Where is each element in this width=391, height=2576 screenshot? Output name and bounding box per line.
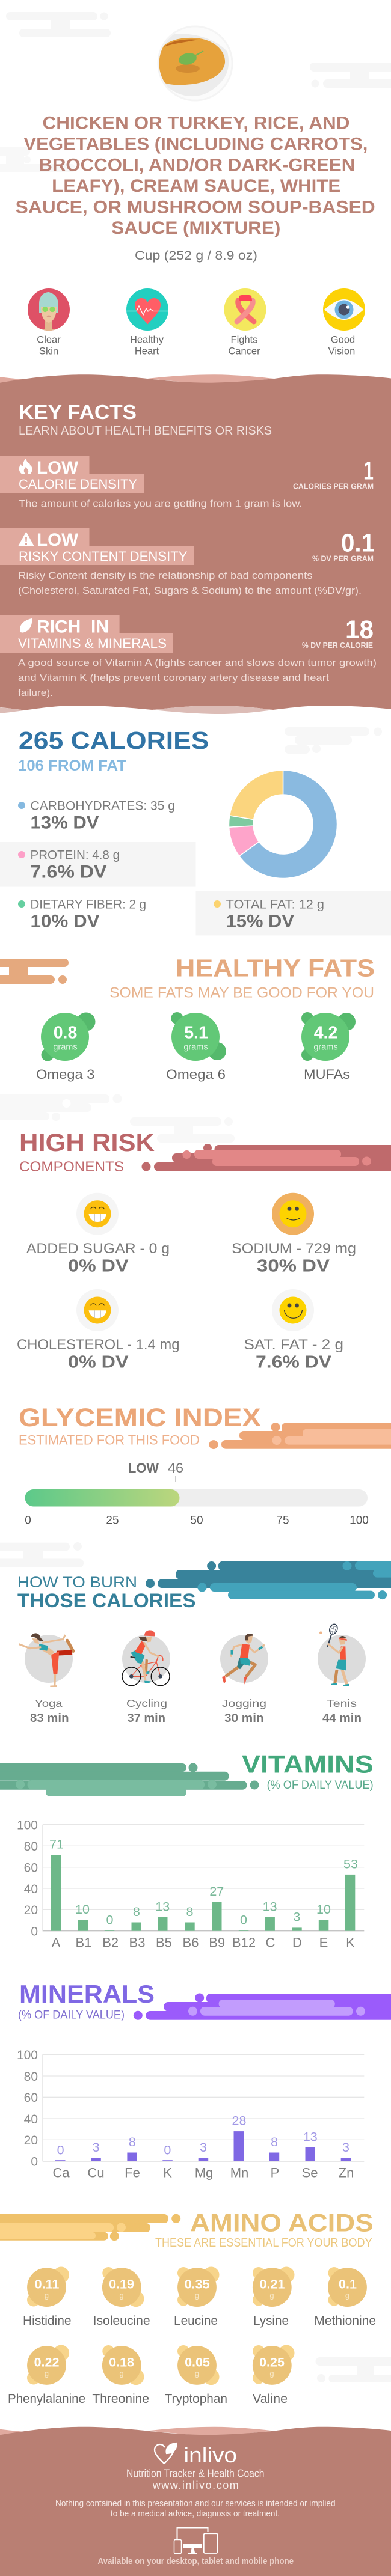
bar chart: minerals: 3 (200, 2140, 207, 2155)
bar chart: vitamins: 71 (49, 1837, 64, 1852)
bar chart: minerals: P (271, 2165, 279, 2181)
bar chart: minerals: 0 (164, 2143, 171, 2157)
heading: HEALTHY FATS (176, 954, 375, 981)
fact: rich in vitamins and minerals: and Vitamin K (helps prevent coronary artery disease and heart (18, 673, 329, 683)
bar chart: vitamins: B1 (76, 1935, 91, 1950)
bubble: omega 3: Omega 3 (36, 1067, 95, 1082)
amino: tryptophan: g (195, 2369, 199, 2378)
bar chart: vitamins: E (319, 1935, 328, 1950)
heading: GLYCEMIC INDEX (19, 1403, 261, 1432)
heading: HIGH RISK (19, 1128, 155, 1156)
title: SAUCE (MIXTURE) (111, 218, 280, 238)
panel: key facts (0, 374, 391, 714)
risk item: saturated fat: 7.6% DV (256, 1353, 331, 1372)
macro: dietary fiber (18, 897, 146, 932)
macro: carbohydrates (18, 799, 175, 833)
macro: carbohydrates: 13% DV (30, 813, 99, 833)
subheading: (% OF DAILY VALUE) (267, 1778, 374, 1792)
risk item: saturated fat: SAT. FAT - 2 g (244, 1337, 343, 1353)
bar chart: vitamins: 8 (186, 1905, 194, 1919)
risk item: sodium: 30% DV (257, 1257, 330, 1276)
bar chart: minerals: 0 (57, 2143, 64, 2157)
bar chart: vitamins: 27 (209, 1884, 224, 1899)
amino: valine: Valine (253, 2392, 288, 2406)
fact: rich in vitamins and minerals: 18 (345, 615, 374, 644)
decorative bars: high risk (142, 1144, 391, 1171)
bar chart: vitamins: B12 (232, 1935, 256, 1950)
panel: high risk components (0, 1094, 391, 1372)
amino: threonine: Threonine (92, 2392, 149, 2406)
amino: methionine: g (345, 2291, 349, 2300)
macro: protein: PROTEIN: 4.8 g (30, 849, 120, 862)
soup bowl image (156, 24, 235, 102)
fact: rich in vitamins and minerals: % DV PER CALORIE (302, 641, 373, 650)
subheading: COMPONENTS (19, 1159, 124, 1175)
activity: yoga: Yoga (35, 1697, 63, 1709)
bubble: MUFAs: 4.2 (314, 1024, 337, 1043)
subheading: (% OF DAILY VALUE) (18, 2009, 125, 2022)
gauge scale: 50 (190, 1515, 203, 1527)
panel: calories (0, 727, 391, 935)
panel: health benefits (28, 288, 365, 357)
bubble: omega 3 (36, 1012, 95, 1082)
bar chart: vitamins: 40 (24, 1882, 38, 1896)
activity: tennis: Tenis (327, 1697, 357, 1709)
title: VEGETABLES (INCLUDING CARROTS, (23, 135, 368, 154)
bar chart: vitamins: 100 (17, 1819, 38, 1832)
website: www.inlivo.com (152, 2479, 239, 2491)
tagline: Nutrition Tracker & Health Coach (126, 2467, 265, 2479)
amino: lysine: 0.21 (260, 2277, 285, 2292)
icon: good vision eye (323, 288, 365, 331)
bar chart: minerals: Cu (88, 2165, 105, 2181)
icon: devices (174, 2528, 218, 2554)
gauge label: low 46: LOW (128, 1460, 159, 1476)
amino: leucine: Leucine (174, 2314, 218, 2328)
decorative bars: healthy fats (0, 959, 69, 984)
decorative bars: burn (146, 1561, 391, 1599)
gauge scale: 0 (25, 1515, 31, 1527)
decorative bars: vitamins (0, 1763, 259, 1796)
decorative cloud: amino (315, 2357, 391, 2382)
decorative cloud: top right (310, 63, 391, 88)
fact: risky content density: (Cholesterol, Saturated Fat, Sugars & Sodium) to the amount (%DV/gr). (18, 585, 362, 596)
amino: tryptophan: 0.05 (185, 2355, 210, 2370)
disclaimer: to be a medical advice, diagnosis or treatment. (111, 2509, 280, 2519)
heading: KEY FACTS (19, 401, 137, 423)
risk item: saturated fat (244, 1289, 343, 1372)
bubble: MUFAs: MUFAs (304, 1067, 350, 1082)
bar chart: minerals (17, 2048, 364, 2181)
benefit labels: Good (331, 334, 355, 345)
bubble: omega 6: grams (183, 1043, 208, 1052)
decorative bars: minerals (134, 1993, 391, 2020)
donut chart (229, 771, 337, 879)
fact: calorie density: CALORIE DENSITY (19, 477, 137, 492)
amino: isoleucine: Isoleucine (93, 2314, 150, 2328)
panel: minerals (17, 1980, 391, 2181)
panel: glycemic index (19, 1403, 391, 1527)
gauge scale: 25 (106, 1515, 119, 1527)
amino: lysine: g (269, 2291, 274, 2300)
bar chart: vitamins: B3 (129, 1935, 145, 1950)
bar chart: minerals: Mg (195, 2165, 213, 2181)
amino: histidine: g (45, 2291, 49, 2300)
decorative cloud: top left (6, 12, 111, 37)
amino: histidine (23, 2267, 72, 2328)
activity: cycling: 37 min (128, 1712, 165, 1725)
bar chart: vitamins: B9 (209, 1935, 225, 1950)
panel: amino acids (0, 2208, 391, 2406)
bar chart: minerals: 20 (24, 2134, 38, 2147)
risk item: added sugar: ADDED SUGAR - 0 g (26, 1241, 170, 1257)
risk item: sodium (232, 1193, 356, 1276)
bar chart: minerals: Se (302, 2165, 318, 2181)
activity: jogging: Jogging (222, 1697, 266, 1709)
amino: valine: g (269, 2369, 274, 2378)
bar chart: vitamins: B5 (156, 1935, 172, 1950)
benefit labels: Healthy (130, 334, 164, 345)
decorative cloud: high risk left (0, 1094, 122, 1121)
bar chart: minerals: 13 (303, 2129, 318, 2144)
heading: AMINO ACIDS (190, 2208, 374, 2236)
heading: 265 calories: 265 CALORIES (19, 727, 209, 754)
amino: isoleucine (93, 2267, 150, 2328)
bar chart: vitamins: 3 (293, 1910, 300, 1924)
disclaimer: Nothing contained in this presentation and our services is intended or implied (55, 2499, 336, 2509)
risk item: added sugar: 0% DV (68, 1257, 129, 1276)
risk item: cholesterol: CHOLESTEROL - 1.4 mg (17, 1337, 179, 1353)
amino: leucine (174, 2267, 219, 2328)
amino: valine: 0.25 (259, 2355, 285, 2370)
fact: rich in vitamins and minerals (0, 615, 377, 698)
amino: lysine (253, 2267, 295, 2328)
decorative bars: amino acids (0, 2214, 180, 2241)
bubble: omega 6: Omega 6 (166, 1067, 226, 1082)
bubble: MUFAs: grams (313, 1043, 338, 1052)
bar chart: minerals: 8 (129, 2135, 136, 2149)
fact: rich in vitamins and minerals: VITAMINS & MINERALS (18, 636, 167, 651)
activity: yoga (19, 1633, 73, 1725)
amino: methionine: 0.1 (339, 2277, 357, 2292)
bubble: omega 3: grams (53, 1043, 78, 1052)
risk item: cholesterol (17, 1289, 179, 1372)
fact: rich in vitamins and minerals: RICH IN (37, 617, 109, 637)
icon: healthy heart (126, 288, 168, 331)
amino: threonine: g (119, 2369, 124, 2378)
heading line two: THOSE CALORIES (17, 1590, 196, 1611)
amino: isoleucine: 0.19 (109, 2277, 134, 2292)
bar chart: minerals: 80 (24, 2070, 38, 2084)
bar chart: vitamins: C (265, 1935, 275, 1950)
decorative cloud: calories (285, 727, 382, 754)
bar chart: vitamins: 53 (343, 1857, 358, 1871)
subheading: ESTIMATED FOR THIS FOOD (19, 1433, 200, 1448)
macro: dietary fiber: 10% DV (30, 912, 100, 932)
amino: valine (253, 2345, 295, 2406)
activity: cycling (122, 1630, 170, 1725)
bar chart: vitamins (17, 1819, 364, 1950)
fact: calorie density: LOW (37, 458, 79, 478)
fact: calorie density: 1 (363, 457, 374, 486)
fact: risky content density: LOW (37, 530, 79, 550)
subheading: from fat: 106 FROM FAT (18, 757, 126, 774)
logo wordmark: inlivo (184, 2443, 237, 2467)
subheading: THESE ARE ESSENTIAL FOR YOUR BODY (155, 2236, 372, 2250)
benefit labels: Fights (231, 334, 257, 345)
amino: methionine (314, 2267, 376, 2328)
decorative cloud: behind title (0, 147, 75, 172)
amino: histidine: 0.11 (35, 2277, 59, 2292)
risk item: cholesterol: 0% DV (68, 1353, 129, 1372)
heading line one: HOW TO BURN (17, 1574, 137, 1591)
amino: phenylalanine (8, 2345, 85, 2406)
bar chart: vitamins: D (292, 1935, 302, 1950)
fact: risky content density (0, 528, 375, 596)
bar chart: minerals: Mn (230, 2165, 248, 2181)
bar chart: minerals: 3 (93, 2140, 100, 2155)
fact: calorie density (0, 456, 374, 510)
activity: jogging (220, 1634, 268, 1725)
bubble: omega 6 (166, 1012, 226, 1082)
amino: histidine: Histidine (23, 2314, 72, 2328)
macro: dietary fiber: DIETARY FIBER: 2 g (30, 897, 146, 911)
amino: leucine: g (195, 2291, 199, 2300)
activity: tennis: 44 min (322, 1712, 362, 1725)
decorative bars: glycemic index (209, 1423, 391, 1449)
title: CHICKEN OR TURKEY, RICE, AND (42, 113, 350, 133)
fact: rich in vitamins and minerals: failure). (18, 688, 53, 698)
bar chart: minerals: 3 (342, 2140, 349, 2155)
heading: MINERALS (19, 1980, 155, 2008)
title (16, 113, 375, 238)
bar chart: vitamins: A (52, 1935, 61, 1950)
bar chart: vitamins: 0 (240, 1913, 247, 1927)
macro: total fat (196, 891, 391, 935)
serving size: Cup (252 g / 8.9 oz) (135, 249, 257, 263)
amino: tryptophan: Tryptophan (165, 2392, 227, 2406)
benefit labels: Clear (37, 334, 61, 345)
bar chart: vitamins: 0 (31, 1924, 38, 1939)
bar chart: vitamins: 10 (75, 1902, 90, 1917)
gauge label: low 46 (128, 1460, 183, 1482)
benefit labels (37, 334, 355, 357)
decorative cloud: high risk right (130, 1117, 235, 1143)
fact: rich in vitamins and minerals: A good source of Vitamin A (fights cancer and slows down tumor growth) (18, 658, 377, 668)
activity: tennis (318, 1623, 366, 1725)
bar chart: minerals: 0 (31, 2155, 38, 2169)
heading: VITAMINS (242, 1750, 374, 1778)
amino: tryptophan (165, 2345, 227, 2406)
risk item: sodium: SODIUM - 729 mg (232, 1241, 356, 1257)
bar chart: vitamins: 0 (106, 1913, 114, 1927)
activity: cycling: Cycling (126, 1697, 167, 1709)
logo: heart and leaf (155, 2443, 177, 2464)
icon: warning triangle (18, 531, 34, 546)
bar chart: vitamins: 20 (24, 1903, 38, 1917)
bar chart: minerals: 100 (17, 2048, 38, 2062)
benefit labels: Cancer (228, 346, 260, 357)
bar chart: vitamins: 10 (316, 1902, 331, 1917)
amino: threonine: 0.18 (109, 2355, 134, 2370)
bar chart: vitamins: 13 (155, 1899, 170, 1914)
bar chart: minerals: Zn (339, 2165, 354, 2181)
fact: risky content density: 0.1 (341, 529, 375, 558)
macro: protein (0, 842, 196, 887)
footer wave background (0, 2427, 391, 2576)
title: LEAFY), CREAM SAUCE, WHITE (52, 176, 340, 196)
icon: clear skin (28, 288, 70, 331)
amino: phenylalanine: 0.22 (34, 2355, 59, 2370)
bubble: omega 6: 5.1 (184, 1024, 208, 1043)
benefit labels: Vision (328, 346, 355, 357)
decorative cloud: burn (0, 1542, 84, 1567)
risk item: added sugar (26, 1193, 170, 1276)
gauge label: low 46: 46 (168, 1460, 183, 1476)
activity: jogging: 30 min (224, 1712, 264, 1725)
bar chart: minerals: 8 (271, 2135, 278, 2149)
macro: protein: 7.6% DV (30, 862, 107, 882)
bar chart: minerals: K (163, 2165, 172, 2181)
bar chart: vitamins: 60 (24, 1861, 38, 1875)
title: BROCCOLI, AND/OR DARK-GREEN (38, 155, 355, 175)
activity: yoga: 83 min (30, 1712, 69, 1725)
panel: vitamins (0, 1750, 374, 1950)
amino: phenylalanine: Phenylalanine (8, 2392, 85, 2406)
amino: phenylalanine: g (45, 2369, 49, 2378)
bubble: MUFAs (301, 1012, 356, 1082)
panel: how to burn those calories (0, 1542, 391, 1725)
fact: risky content density: % DV PER GRAM (312, 554, 374, 563)
subheading: SOME FATS MAY BE GOOD FOR YOU (109, 985, 374, 1001)
fact: risky content density: RISKY CONTENT DENSITY (19, 549, 188, 564)
macro: total fat: TOTAL FAT: 12 g (226, 897, 324, 911)
panel: healthy fats (0, 954, 375, 1082)
title: SAUCE, OR MUSHROOM SOUP-BASED (16, 197, 375, 217)
fact: risky content density: Risky Content density is the relationship of bad components (18, 570, 313, 581)
bar chart: vitamins: 8 (133, 1905, 140, 1919)
amino: isoleucine: g (119, 2291, 124, 2300)
macro: total fat: 15% DV (226, 912, 294, 932)
benefit labels: Skin (39, 346, 58, 357)
bar chart: vitamins: K (346, 1935, 355, 1950)
benefit labels: Heart (135, 346, 159, 357)
bar chart: vitamins: B6 (183, 1935, 199, 1950)
icon: flame (19, 459, 32, 474)
wave band background (0, 374, 391, 714)
panel: footer (0, 2427, 391, 2576)
amino: leucine: 0.35 (185, 2277, 209, 2292)
disclaimer (55, 2499, 336, 2519)
bar chart: minerals: 28 (232, 2114, 246, 2128)
gauge scale: 75 (276, 1515, 289, 1527)
icon: leaf (20, 618, 32, 633)
amino: threonine (92, 2345, 149, 2406)
bar chart: vitamins: 13 (263, 1899, 277, 1914)
bar chart: minerals: Fe (125, 2165, 140, 2181)
gauge bar (25, 1489, 368, 1506)
icon: fights cancer ribbon (224, 288, 266, 331)
amino: lysine: Lysine (253, 2314, 289, 2328)
fact: calorie density: The amount of calories you are getting from 1 gram is low. (19, 499, 302, 510)
gauge scale: 100 (349, 1515, 369, 1527)
bar chart: minerals: 60 (24, 2091, 38, 2105)
bar chart: vitamins: B2 (102, 1935, 119, 1950)
bar chart: minerals: 40 (24, 2113, 38, 2126)
macro: carbohydrates: CARBOHYDRATES: 35 g (30, 799, 175, 813)
bar chart: vitamins: 80 (24, 1840, 38, 1854)
amino: methionine: Methionine (314, 2314, 376, 2328)
bubble: omega 3: 0.8 (54, 1024, 77, 1043)
availability note: Available on your desktop, tablet and mobile phone (97, 2556, 294, 2566)
gauge scale (25, 1515, 369, 1527)
bar chart: minerals: Ca (53, 2165, 70, 2181)
fact: calorie density: CALORIES PER GRAM (293, 482, 374, 490)
subheading: LEARN ABOUT HEALTH BENEFITS OR RISKS (19, 424, 272, 438)
